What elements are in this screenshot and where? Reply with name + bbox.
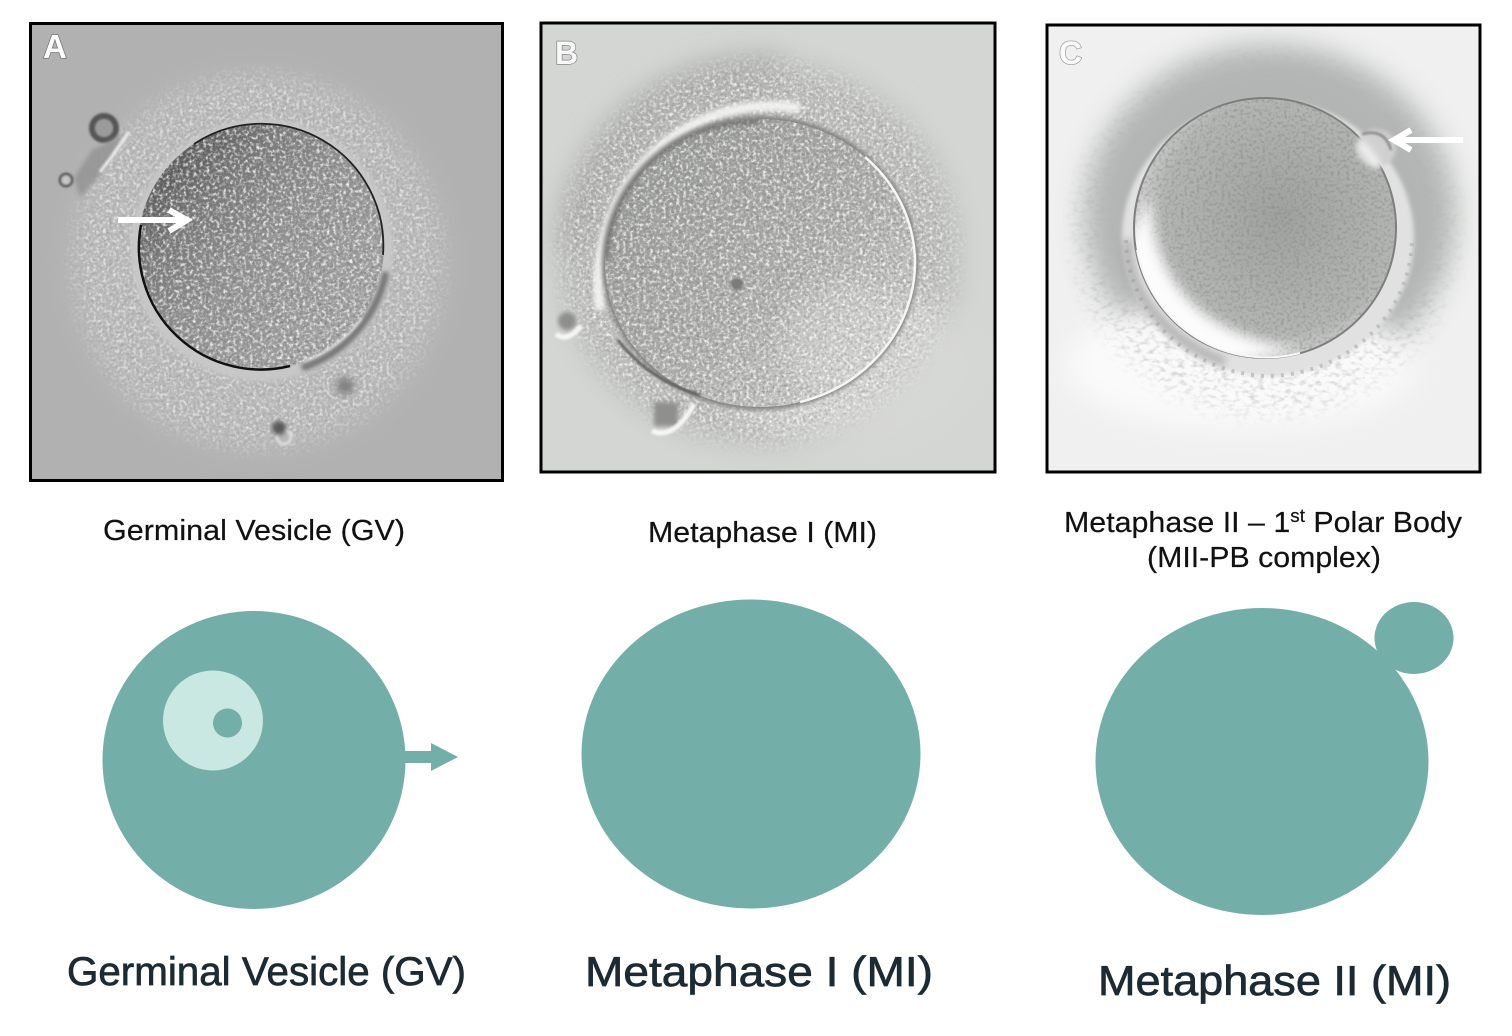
label C: C [1059,35,1082,71]
polar body [1374,602,1454,674]
nucleolus [213,708,242,738]
icon: polar body [1356,129,1396,167]
label B: B [555,35,578,71]
diagram: metaphase II oocyte with polar body [1096,602,1454,915]
heading: metaphase I: Metaphase I (MI) [585,948,933,995]
caption: metaphase II polar body [1064,506,1463,574]
icon: debris at lower edge [272,377,354,444]
icon: debris lower left [556,278,743,433]
caption: metaphase II polar body: (MII-PB complex) [1147,542,1381,574]
arrow: to next stage [404,743,458,771]
caption: metaphase I: Metaphase I (MI) [648,517,877,549]
caption: metaphase II polar body: Metaphase II – 1 [1064,507,1280,539]
panel: micrograph B metaphase I oocyte [541,23,995,472]
panel: micrograph A germinal vesicle oocyte [30,24,502,480]
diagram: metaphase I oocyte [582,600,920,908]
diagram: germinal vesicle oocyte [102,611,458,909]
caption: metaphase II polar body: st [1290,506,1305,526]
arrow pointing to polar body [1394,130,1463,150]
heading: metaphase II: Metaphase II (MI) [1098,957,1451,1004]
icon: cumulus debris upper left [60,116,129,198]
germinal vesicle nucleus [163,670,263,770]
caption: metaphase II polar body: Polar Body [1305,507,1463,539]
caption: germinal vesicle: Germinal Vesicle (GV) [103,515,405,547]
arrow pointing to germinal vesicle [118,210,187,231]
label A: A [43,28,67,65]
heading: germinal vesicle: Germinal Vesicle (GV) [67,950,466,994]
panel: micrograph C metaphase II oocyte with polar body [1047,25,1480,472]
